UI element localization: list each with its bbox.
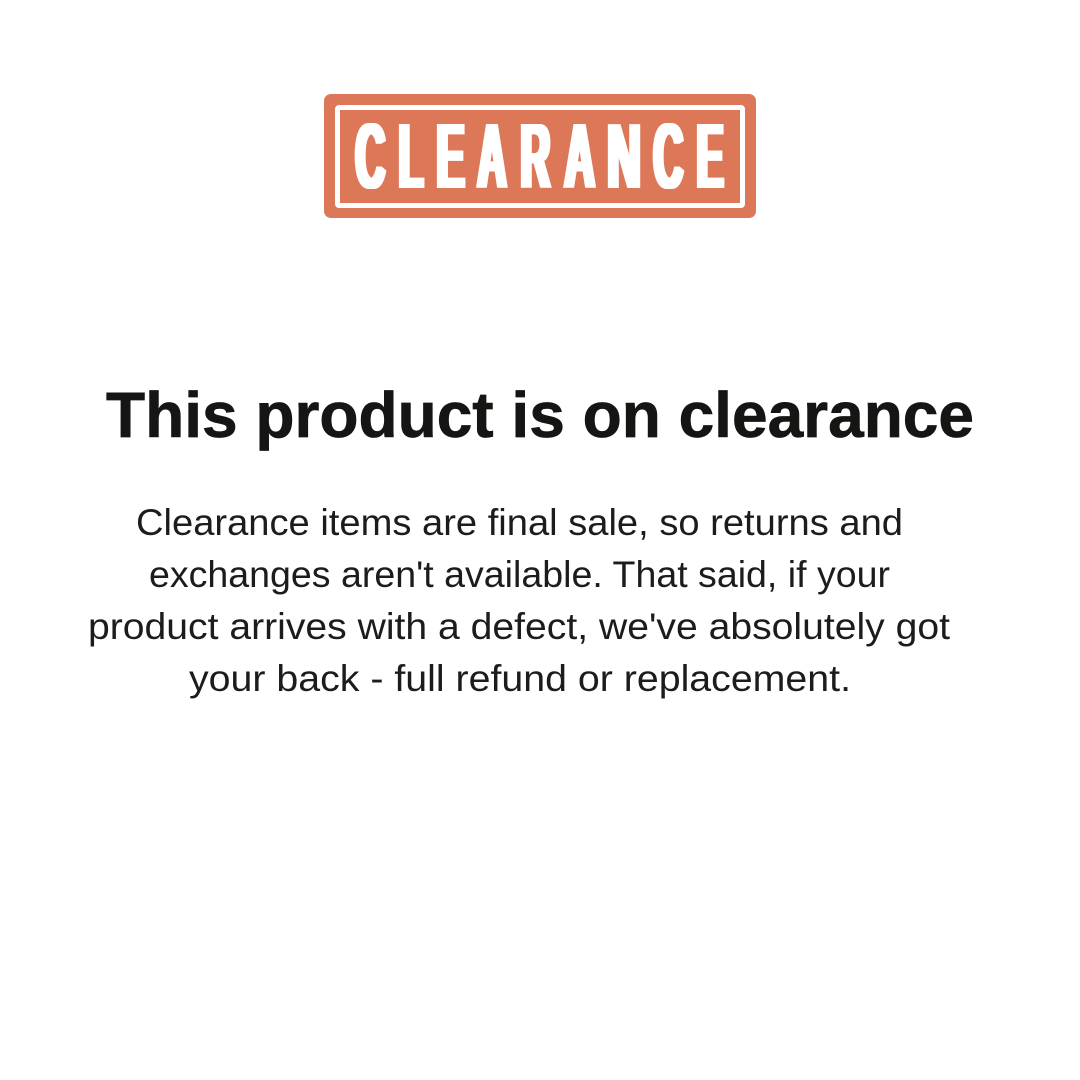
badge label: N (607, 103, 641, 208)
body line 2: exchanges aren't available. That said, if your (149, 554, 890, 595)
body line 3: product arrives with a defect, we've absolutely got (88, 606, 951, 647)
body line 1: Clearance items are final sale, so returns and (136, 502, 903, 543)
badge label: A (564, 105, 595, 209)
title: This product is on clearance (106, 379, 974, 451)
badge label: E (437, 105, 465, 209)
badge label: E (697, 105, 723, 209)
body text (88, 502, 951, 699)
badge label: C (356, 105, 385, 209)
badge label: A (478, 105, 506, 209)
badge label: C (654, 105, 683, 209)
body line 4: your back - full refund or replacement. (189, 658, 851, 699)
badge label (356, 103, 723, 209)
badge label: L (399, 105, 423, 209)
badge inner border (338, 108, 742, 206)
badge background (324, 94, 756, 218)
badge label: R (521, 105, 550, 209)
clearance badge (324, 94, 756, 218)
